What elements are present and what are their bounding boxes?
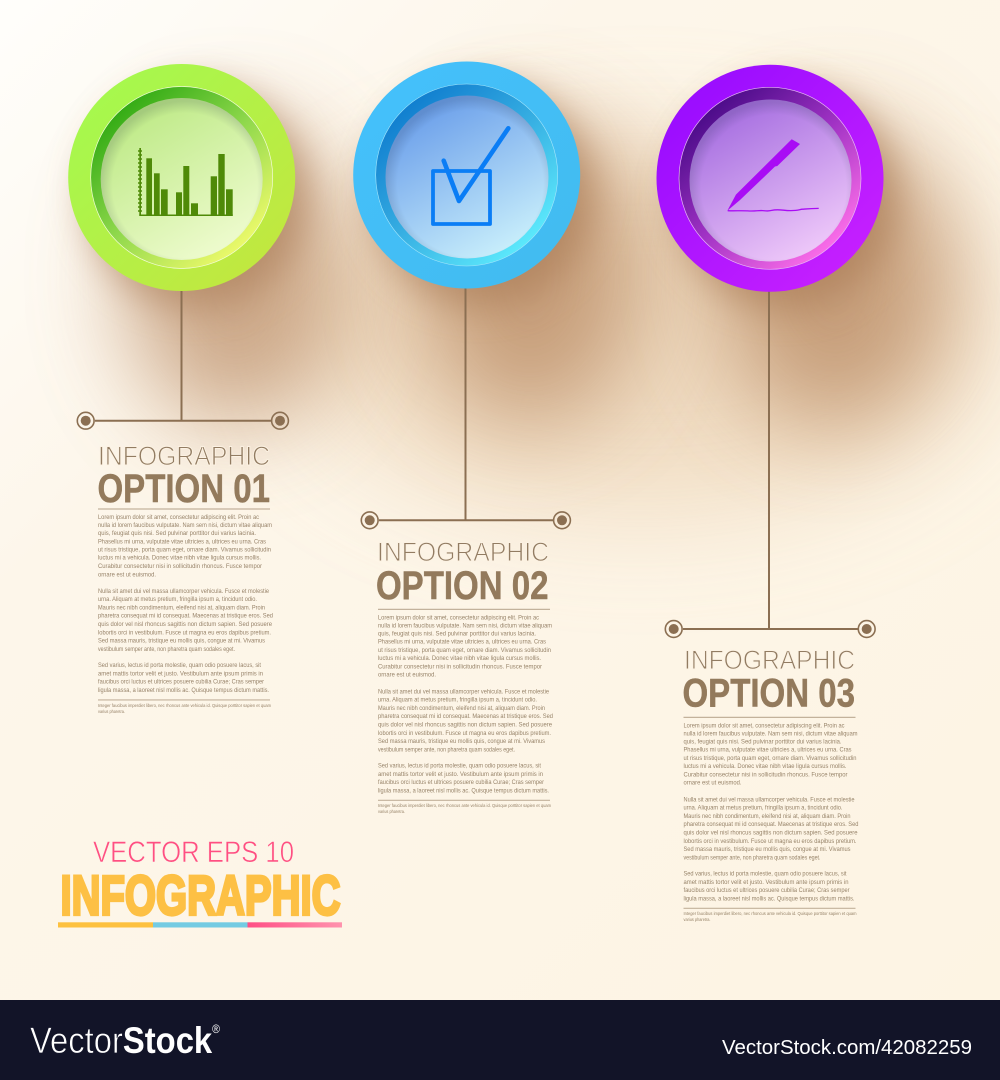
option 03 text block: Mauris nec nibh condimentum, eleifend nisi at, aliquam diam. Proin xyxy=(684,813,851,820)
icon: bar chart xyxy=(138,148,233,216)
option 03 text block: ut risus tristique, porta quam eget, ornare diam. Vivamus sollicitudin xyxy=(684,755,857,762)
option 02 text block: Curabitur consectetur nisi in sollicitudin rhoncus. Fusce tempor xyxy=(378,663,543,670)
option 01 text block: vestibulum semper ante, non pharetra quam sodales eget. xyxy=(98,646,235,653)
option 03 text block: amet mattis tortor velit et justo. Vestibulum ante ipsum primis in xyxy=(684,879,849,886)
blue circle button xyxy=(353,62,580,288)
option 01 text block: faucibus orci luctus et ultrices posuere cubilia Curae; Cras semper xyxy=(98,678,265,686)
option 03 heading: OPTION 03 xyxy=(682,672,855,716)
option 01 heading xyxy=(98,441,270,511)
option 03 text block: vestibulum semper ante, non pharetra quam sodales eget. xyxy=(684,854,821,861)
option 03 text block xyxy=(684,717,859,922)
watermark footer bar: VectorStock xyxy=(30,1020,224,1061)
option 02 text block: Sed varius, lectus id porta molestie, quam odio posuere lacus, sit xyxy=(378,763,541,770)
option 01 text block: quis, feugiat quis nisi. Sed pulvinar porttitor dui varius lacinia. xyxy=(98,530,256,537)
option 02 text block: varius pharetra. xyxy=(378,809,405,814)
option 02 text block xyxy=(378,609,553,814)
option 02 text block: Sed massa mauris, tristique eu mollis quis, congue at mi. Vivamus xyxy=(378,738,545,745)
option 02 text block: Phasellus mi urna, vulputate vitae ultricies a, ultrices eu urna. Cras xyxy=(378,639,546,646)
option 02 text block: urna. Aliquam at metus pretium, fringilla ipsum a, tincidunt odio. xyxy=(378,697,537,704)
option 01 text block: Sed varius, lectus id porta molestie, quam odio posuere lacus, sit xyxy=(98,662,261,669)
option 03 text block: Phasellus mi urna, vulputate vitae ultricies a, ultrices eu urna. Cras xyxy=(684,747,852,754)
option 02 text block: faucibus orci luctus et ultrices posuere cubilia Curae; Cras semper xyxy=(378,779,545,786)
option 03 text block: Sed massa mauris, tristique eu mollis quis, congue at mi. Vivamus xyxy=(684,846,850,853)
option 02 text block: quis, feugiat quis nisi. Sed pulvinar porttitor dui varius lacinia. xyxy=(378,631,536,638)
option 01 text block: nulla id lorem faucibus vulputate. Nam sem nisi, dictum vitae aliquam xyxy=(98,522,272,529)
option 01 text block: urna. Aliquam at metus pretium, fringilla ipsum a, tincidunt odio. xyxy=(98,596,257,603)
option 02 text block: Mauris nec nibh condimentum, eleifend nisi at, aliquam diam. Proin xyxy=(378,705,545,712)
option 02 text block: Lorem ipsum dolor sit amet, consectetur adipiscing elit. Proin ac xyxy=(378,614,540,621)
option 03 text block: Integer faucibus imperdiet libero, nec rhoncus ante vehicula id. Quisque porttitor sapien et quam xyxy=(684,911,857,916)
option 02 text block: amet mattis tortor velit et justo. Vestibulum ante ipsum primis in xyxy=(378,771,543,778)
option 03 text block: ligula massa, a laoreet nisl mollis ac. Quisque tempus dictum mattis. xyxy=(684,895,855,902)
option 02 heading: INFOGRAPHIC xyxy=(377,537,549,567)
option 03 text block: Curabitur consectetur nisi in sollicitudin rhoncus. Fusce tempor xyxy=(684,771,848,778)
option 01 text block: ligula massa, a laoreet nisl mollis ac. Quisque tempus dictum mattis. xyxy=(98,687,269,694)
watermark footer bar: ® xyxy=(212,1022,220,1036)
option 02 text block: vestibulum semper ante, non pharetra quam sodales eget. xyxy=(378,746,515,753)
option 02 text block: ut risus tristique, porta quam eget, ornare diam. Vivamus sollicitudin xyxy=(378,647,551,654)
option 01 text block: ut risus tristique, porta quam eget, ornare diam. Vivamus sollicitudin xyxy=(98,546,271,554)
option 01 text block: amet mattis tortor velit et justo. Vestibulum ante ipsum primis in xyxy=(98,670,263,678)
option 02 text block: nulla id lorem faucibus vulputate. Nam sem nisi, dictum vitae aliquam xyxy=(378,622,552,629)
option 01 text block: varius pharetra. xyxy=(98,709,125,714)
option 03 text block: luctus mi a vehicula. Donec vitae nibh vitae ligula cursus mollis. xyxy=(684,763,847,770)
option 02 heading: OPTION 02 xyxy=(376,564,548,608)
option 02 text block: Integer faucibus imperdiet libero, nec rhoncus ante vehicula id. Quisque porttitor sapien et quam xyxy=(378,803,551,808)
watermark footer bar xyxy=(0,1000,1000,1080)
option 03 text block: Nulla sit amet dui vel massa ullamcorper vehicula. Fusce et molestie xyxy=(684,797,855,804)
option 03 heading xyxy=(682,645,855,716)
icon: checkbox with tick xyxy=(433,128,508,224)
option 03 heading: INFOGRAPHIC xyxy=(684,645,855,675)
option 01 text block: quis dolor vel nisl rhoncus sagittis non dictum sapien. Sed posuere xyxy=(98,621,272,628)
option 01 text block: ornare est ut euismod. xyxy=(98,571,156,578)
option 01 text block: lobortis orci in vestibulum. Fusce ut magna eu eros dapibus pretium. xyxy=(98,630,271,636)
option 03 text block: nulla id lorem faucibus vulputate. Nam sem nisi, dictum vitae aliquam xyxy=(684,730,858,737)
connector: option 03 xyxy=(665,291,875,637)
option 01 text block: Curabitur consectetur nisi in sollicitudin rhoncus. Fusce tempor xyxy=(98,563,263,570)
connector: option 02 xyxy=(361,288,570,529)
option 02 text block: quis dolor vel nisl rhoncus sagittis non dictum sapien. Sed posuere xyxy=(378,721,552,728)
option 01 text block: Mauris nec nibh condimentum, eleifend nisi at, aliquam diam. Proin xyxy=(98,604,265,612)
option 01 text block: Integer faucibus imperdiet libero, nec rhoncus ante vehicula id. Quisque porttitor sapien et quam xyxy=(98,703,271,708)
option 03 text block: Sed varius, lectus id porta molestie, quam odio posuere lacus, sit xyxy=(684,871,847,878)
option 02 text block: luctus mi a vehicula. Donec vitae nibh vitae ligula cursus mollis. xyxy=(378,655,541,662)
option 01 text block xyxy=(98,508,273,714)
option 03 text block: varius pharetra. xyxy=(684,917,710,922)
option 03 text block: quis dolor vel nisl rhoncus sagittis non dictum sapien. Sed posuere xyxy=(684,829,858,836)
option 01 text block: Sed massa mauris, tristique eu mollis quis, congue at mi. Vivamus xyxy=(98,638,265,644)
option 02 heading xyxy=(376,537,549,608)
option 02 text block: lobortis orci in vestibulum. Fusce ut magna eu eros dapibus pretium. xyxy=(378,730,551,737)
option 03 text block: quis, feugiat quis nisi. Sed pulvinar porttitor dui varius lacinia. xyxy=(684,739,842,746)
option 03 text block: pharetra consequat mi id consequat. Maecenas at tristique eros. Sed xyxy=(684,821,859,828)
option 03 text block: Lorem ipsum dolor sit amet, consectetur adipiscing elit. Proin ac xyxy=(684,722,845,729)
option 02 text block: ornare est ut euismod. xyxy=(378,672,436,679)
watermark footer bar: VectorStock.com/42082259 xyxy=(722,1037,972,1059)
option 01 heading: OPTION 01 xyxy=(98,467,270,511)
option 02 text block: Nulla sit amet dui vel massa ullamcorper vehicula. Fusce et molestie xyxy=(378,689,549,696)
option 01 text block: pharetra consequat mi id consequat. Maecenas at tristique eros. Sed xyxy=(98,612,273,620)
option 01 heading: INFOGRAPHIC xyxy=(98,441,270,471)
title: vector eps 10 infographic: VECTOR EPS 10 xyxy=(93,836,294,869)
green circle button xyxy=(68,64,295,291)
title: vector eps 10 infographic: INFOGRAPHIC xyxy=(60,863,340,926)
title: vector eps 10 infographic xyxy=(58,836,342,928)
option 01 text block: Nulla sit amet dui vel massa ullamcorper vehicula. Fusce et molestie xyxy=(98,588,269,595)
option 01 text block: Lorem ipsum dolor sit amet, consectetur adipiscing elit. Proin ac xyxy=(98,514,260,521)
option 03 text block: lobortis orci in vestibulum. Fusce ut magna eu eros dapibus pretium. xyxy=(684,838,857,845)
option 03 text block: faucibus orci luctus et ultrices posuere cubilia Curae; Cras semper xyxy=(684,887,850,894)
connector: option 01 xyxy=(77,290,288,429)
icon: pen writing a line xyxy=(727,139,819,211)
option 03 text block: urna. Aliquam at metus pretium, fringilla ipsum a, tincidunt odio. xyxy=(684,805,843,812)
option 01 text block: luctus mi a vehicula. Donec vitae nibh vitae ligula cursus mollis. xyxy=(98,555,261,562)
purple circle button xyxy=(656,65,884,292)
option 02 text block: pharetra consequat mi id consequat. Maecenas at tristique eros. Sed xyxy=(378,713,553,720)
option 03 text block: ornare est ut euismod. xyxy=(684,780,742,787)
option 01 text block: Phasellus mi urna, vulputate vitae ultricies a, ultrices eu urna. Cras xyxy=(98,538,266,545)
option 02 text block: ligula massa, a laoreet nisl mollis ac. Quisque tempus dictum mattis. xyxy=(378,787,549,794)
